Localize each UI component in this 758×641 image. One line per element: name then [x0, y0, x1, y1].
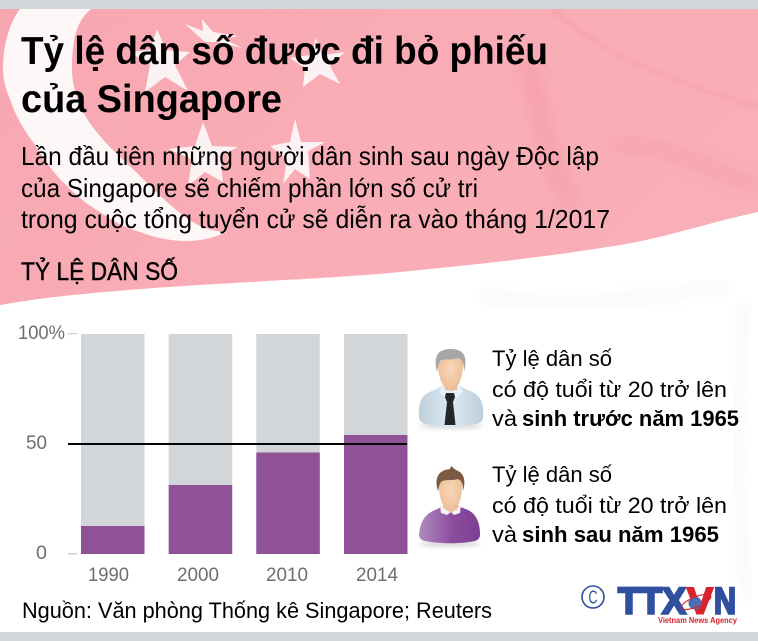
crescent	[3, 9, 227, 241]
logo: TTXVN: TTX	[618, 580, 686, 622]
icon: older man	[419, 349, 483, 429]
logo: TTXVN: V	[687, 580, 713, 622]
legend text: born after 1965: có độ tuổi từ 20 trở lên	[492, 493, 727, 518]
logo: TTXVN: Vietnam News Agency	[658, 616, 738, 625]
title: của Singapore	[21, 78, 282, 121]
year labels: 2014	[356, 565, 398, 586]
logo: TTXVN: N	[714, 580, 736, 622]
legend text: born before 1965: sinh trước năm 1965	[522, 406, 739, 431]
50 percent line	[68, 443, 407, 445]
legend text: born after 1965: Tỷ lệ dân số	[492, 462, 612, 487]
legend text: born after 1965: và	[492, 522, 518, 547]
year labels: 1990	[88, 565, 129, 586]
flag stars	[130, 19, 345, 186]
bar 2014	[344, 334, 408, 554]
y axis: 100%	[18, 323, 65, 344]
y axis: 0	[36, 543, 47, 564]
year labels	[88, 565, 398, 586]
top band	[0, 0, 758, 9]
y axis	[18, 323, 77, 564]
bar 2010	[256, 334, 320, 554]
chart heading: TỶ LỆ DÂN SỐ	[21, 256, 178, 286]
legend text: born before 1965: và	[492, 406, 518, 431]
legend text: born after 1965	[492, 462, 727, 547]
subtitle text: trong cuộc tổng tuyển cử sẽ diễn ra vào tháng 1/2017	[21, 204, 610, 234]
legend text: born after 1965: sinh sau năm 1965	[522, 522, 719, 547]
subtitle text	[21, 141, 610, 234]
year labels: 2000	[177, 565, 219, 586]
icon: younger man	[419, 466, 481, 547]
year labels: 2010	[266, 565, 308, 586]
bar 2000	[169, 334, 232, 554]
legend text: born before 1965: có độ tuổi từ 20 trở lên	[492, 377, 727, 402]
logo: TTXVN	[618, 580, 738, 625]
y axis: 50	[26, 433, 47, 454]
bottom band	[0, 632, 758, 641]
title	[21, 30, 548, 121]
subtitle text: Lần đầu tiên những người dân sinh sau ngày Độc lập	[21, 141, 599, 171]
legend text: born before 1965: Tỷ lệ dân số	[492, 346, 612, 371]
legend text: born before 1965	[492, 346, 739, 431]
bar 1990	[81, 334, 144, 554]
title: Tỷ lệ dân số được đi bỏ phiếu	[21, 30, 548, 73]
stacked bar chart	[18, 323, 408, 586]
subtitle text: của Singapore sẽ chiếm phần lớn số cử tri	[21, 173, 478, 203]
copyright symbol	[582, 586, 604, 608]
copyright symbol: C	[588, 588, 598, 608]
source: Nguồn: Văn phòng Thống kê Singapore; Reuters	[22, 598, 492, 623]
